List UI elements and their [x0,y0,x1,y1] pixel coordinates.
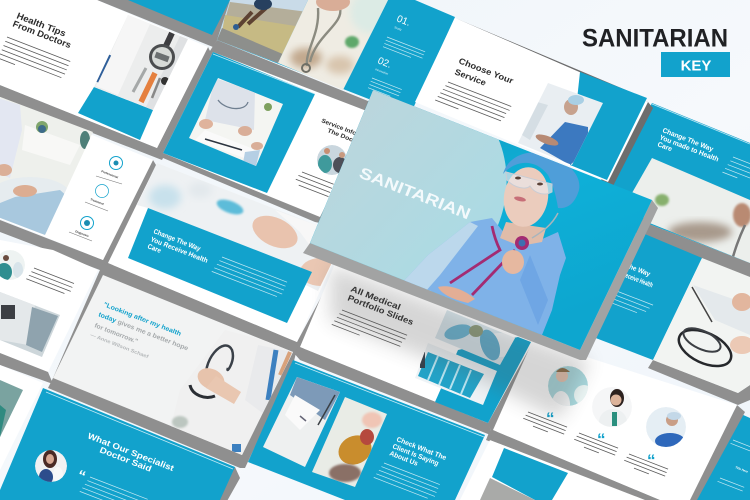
slide: quote [48,263,300,468]
face [499,164,553,230]
photo: gloves [435,310,515,365]
photo: surgeon [518,83,603,165]
neck [500,222,546,246]
slide: right bottom blue [680,408,750,500]
slide: top blue fragment [97,0,240,47]
heading: Receive Health [621,271,654,289]
ordered list: Innovation [375,67,389,76]
heading: Portfolio Slides [346,293,415,327]
heading: Doctor Said [98,445,153,474]
icon: quote marks: “ [597,430,606,449]
slide: doctor with clipboard [160,52,372,225]
heading: About Us [388,450,419,468]
photo: blurred room [632,158,750,263]
slide: consultation icons [0,90,159,272]
photo: doctor with stethoscope [171,340,293,455]
quote text: for tomorrow." [93,322,139,345]
body lines [80,476,148,500]
icon: quote marks: “ [647,451,656,470]
heading: The Doctor [326,128,363,147]
heading: Client Is Saying [391,443,439,467]
photo: specialist avatar [35,450,67,485]
icon: treatment: Treatment [90,197,104,206]
heading: All Medical [349,284,402,312]
body lines [374,462,440,500]
heading: Care [146,243,162,255]
icon: treatment [85,184,108,211]
icon: diagnosis: Diagnosis [75,229,90,238]
photo: circular consult [317,145,347,175]
gown [400,218,566,335]
photo: doctor 2 [592,387,632,427]
body lines [722,156,750,184]
slide: three doctors testimonial [490,340,745,500]
heading [346,284,415,327]
icon: quote mark: “ [74,467,88,485]
heading [320,118,363,147]
pale circle panel [310,90,507,300]
photo: doctor 3 [646,407,686,449]
slide: all medical portfolio [296,266,532,434]
heading: Choose Your [457,56,516,86]
heading: Check What The [395,436,447,462]
slide: choose your service [415,18,653,188]
photo: hallway [0,292,60,357]
panel: blue block [435,337,531,423]
icon: quote marks: “ [546,409,554,428]
photo: consultation [0,97,93,235]
slide: what our specialist [0,388,240,500]
heading [146,228,209,265]
quote text: today gives me a better hope [97,311,190,353]
slide: health tips [0,0,214,160]
icon: professional [96,156,122,184]
panel: blue band [78,87,153,140]
heading: Health Tips [15,11,67,39]
body lines [332,309,407,351]
quote text: — Anne Wilson Schaef [89,332,150,360]
badge: key [661,52,730,77]
nurse photo [400,152,579,335]
photo: stethoscope [278,0,388,90]
title: SANITARIAN [582,24,728,52]
body lines [0,35,70,83]
ordered list: Study [394,25,403,32]
heading [621,262,654,289]
slide: change the way receive [108,165,332,350]
body lines [606,289,653,317]
hero title: SANITARIAN [356,165,473,223]
quote text: "Looking after my health [102,301,182,338]
heading: Service Info [320,118,357,137]
icon: professional: Professional [101,169,119,179]
photo: white coat [94,15,188,110]
photo: vials [415,343,497,405]
slide: teal photo fragment [0,365,43,470]
surgical cap [503,152,579,208]
icon: diagnosis [69,216,94,241]
ordered list [368,14,425,99]
photo: clipboard [650,255,750,400]
slide: right bottom blue: Title Here [735,465,749,474]
heading: From Doctors [11,19,73,50]
slide: team and hallway [0,240,98,384]
heading: You Receive Health [149,236,209,265]
heading: Change The Way [661,127,714,153]
slide: runner and stethoscope [210,0,455,110]
body lines [294,171,334,197]
icon: quote marks [546,409,656,470]
body lines [435,80,511,126]
heading: You made to Health [658,134,719,164]
body lines [212,256,287,298]
photo: doctor 1 [548,366,588,406]
heading: Care [656,141,673,153]
main slide: sanitarian hero [303,90,658,360]
goggles [506,172,552,194]
slide: bottom fragment [460,430,660,500]
photo: team circle [0,250,25,281]
eyes and lips [515,176,521,180]
body lines [522,411,668,480]
badge: key: KEY [681,58,711,74]
photo: doctor writing [189,78,283,166]
panel: blue block [128,208,312,323]
heading: Change The Way [152,228,202,253]
slide: check what the client [248,360,485,500]
shadow cast by main slide [330,265,590,420]
hands [502,250,524,274]
slide: right blue with photo [614,103,750,277]
slide: clipboard and stethoscope [593,232,750,405]
ordered list: 01. [395,14,412,29]
heading: What Our Specialist [86,431,176,473]
stethoscope tubes [532,213,558,238]
photo: white coat close-up [263,377,340,467]
panel: blue block [570,72,647,180]
body lines [26,267,74,295]
heading: The Way [624,262,651,278]
photo: runner [217,0,308,63]
photo: blurred clinic [137,163,332,291]
ordered list: 02. [376,56,393,71]
heading: Service [453,67,488,88]
photo: heart model [312,397,387,487]
quote text [89,301,190,360]
